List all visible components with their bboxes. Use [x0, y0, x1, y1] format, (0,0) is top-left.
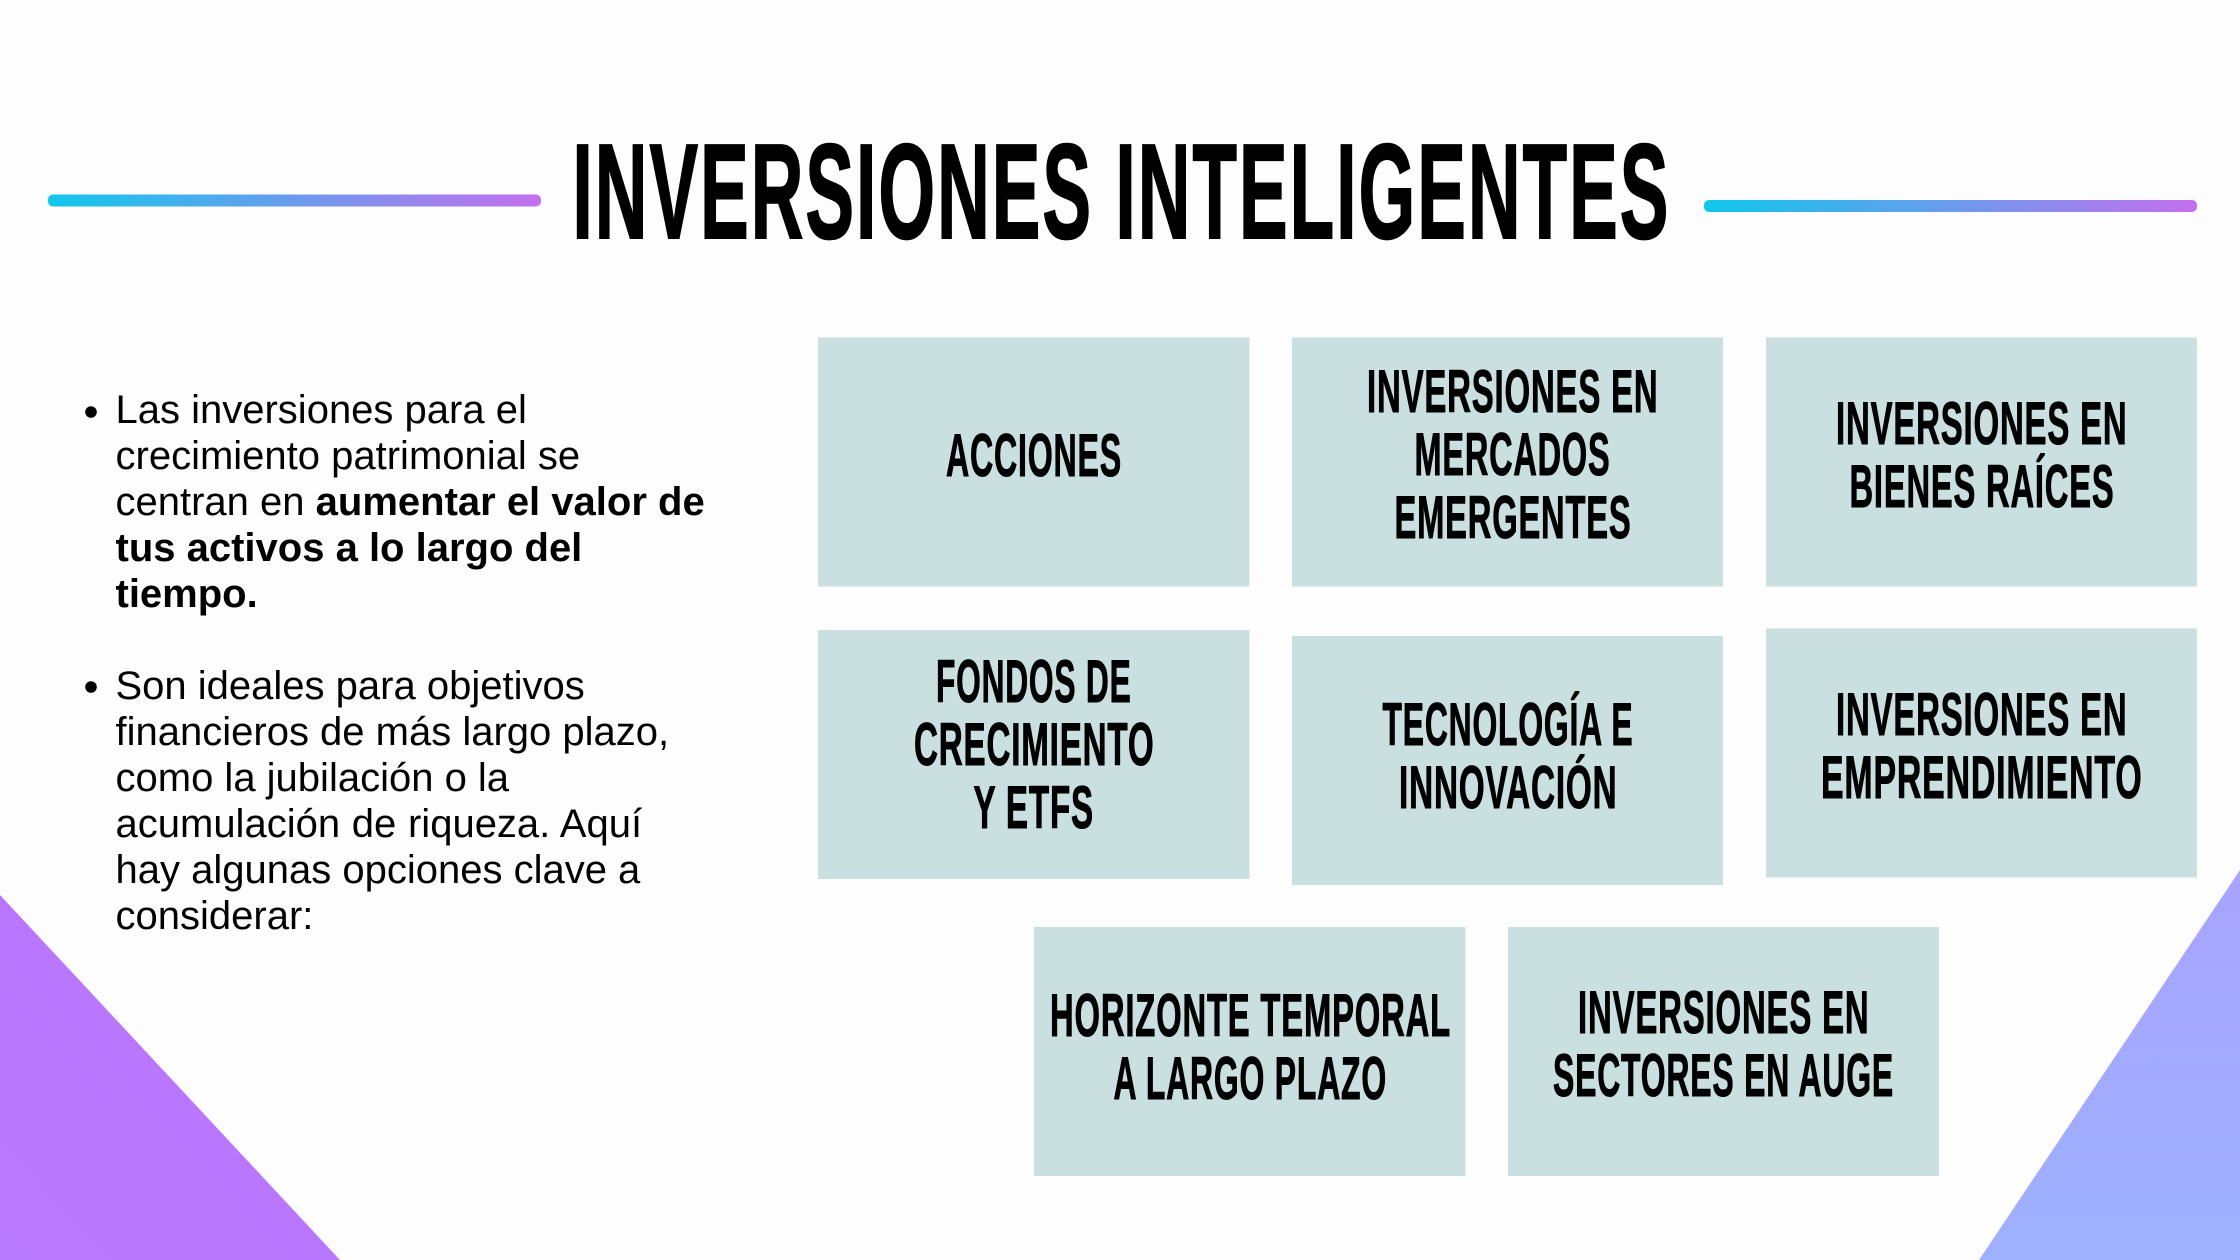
bullet 2: como la jubilación o la: [116, 756, 510, 800]
decorative triangle: bottom left: [0, 895, 340, 1260]
bullet 2: financieros de más largo plazo,: [116, 710, 669, 754]
panel: acciones: ACCIONES: [946, 421, 1122, 489]
text block: introduction bullets: [85, 388, 705, 938]
bullet 2: Son ideales para objetivos: [116, 664, 585, 708]
panel: sectores en auge: SECTORES EN AUGE: [1553, 1041, 1894, 1109]
panel: tecnologia e innovacion: TECNOLOGÍA E: [1382, 690, 1634, 758]
bullet 1: tiempo.: [116, 572, 258, 616]
panel: mercados emergentes: EMERGENTES: [1394, 483, 1632, 551]
panel: horizonte temporal: HORIZONTE TEMPORAL: [1050, 981, 1451, 1049]
panel: tecnologia e innovacion: [1292, 636, 1723, 885]
bullet 1: centran en aumentar el valor de: [116, 480, 705, 524]
bullet 2: considerar:: [116, 894, 313, 938]
panel: sectores en auge: [1508, 927, 1939, 1176]
panel: tecnologia e innovacion: INNOVACIÓN: [1399, 753, 1618, 821]
panel: horizonte temporal: A LARGO PLAZO: [1114, 1044, 1387, 1112]
bullet 2: hay algunas opciones clave a: [116, 848, 641, 892]
panel: mercados emergentes: MERCADOS: [1414, 420, 1610, 488]
panel: fondos de crecimiento: FONDOS DE: [936, 647, 1132, 715]
panel: mercados emergentes: INVERSIONES EN: [1367, 357, 1658, 425]
bullet 1: Las inversiones para el: [116, 388, 527, 432]
decorative triangle: bottom right: [1979, 870, 2240, 1260]
bullet 1: tus activos a lo largo del: [116, 526, 582, 570]
panel: emprendimiento: [1766, 628, 2197, 878]
panel: mercados emergentes: [1292, 338, 1723, 586]
bullet 2: acumulación de riqueza. Aquí: [116, 802, 642, 846]
panel: fondos de crecimiento: Y ETFS: [974, 773, 1094, 841]
panel: horizonte temporal: [1034, 927, 1466, 1176]
panel: sectores en auge: INVERSIONES EN: [1578, 978, 1870, 1046]
bullet 1: crecimiento patrimonial se: [116, 434, 580, 478]
panel: fondos de crecimiento: [818, 630, 1250, 879]
bullet 2: [85, 664, 669, 938]
panel: bienes raices: [1766, 338, 2197, 586]
left gradient title line: [48, 194, 541, 206]
panel: acciones: [818, 338, 1250, 586]
panel: fondos de crecimiento: CRECIMIENTO: [914, 710, 1154, 778]
right gradient title line: [1704, 200, 2197, 212]
bullet 1: [85, 388, 705, 616]
